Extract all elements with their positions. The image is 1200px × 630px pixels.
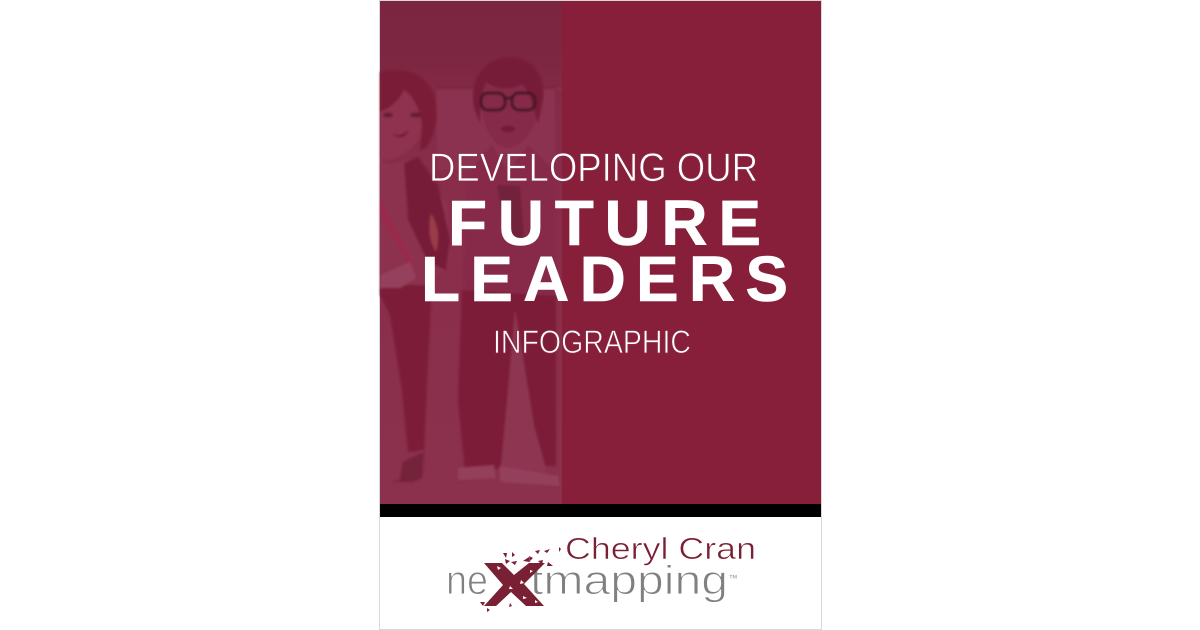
heading: developing our: DEVELOPING OUR xyxy=(429,146,758,190)
faded photo panel xyxy=(380,1,562,504)
subheading: infographic: INFOGRAPHIC xyxy=(493,324,691,360)
maroon background xyxy=(380,1,821,504)
black band xyxy=(380,504,821,517)
man figure xyxy=(458,57,560,486)
logo: Cheryl Cran nextmapping xyxy=(446,531,756,612)
logo text: trademark: ™ xyxy=(728,573,738,583)
logo icon: shattered X xyxy=(480,547,561,612)
woman figure xyxy=(380,70,450,482)
logo text: ne: ne xyxy=(446,557,488,603)
cover panel xyxy=(380,0,822,630)
heading: future: FUTURE xyxy=(448,187,761,259)
heading: leaders: LEADERS xyxy=(421,243,788,315)
illustration: two cartoon leaders xyxy=(380,57,562,486)
logo text: Cheryl Cran: Cheryl Cran xyxy=(565,531,756,566)
logo text: tmapping: tmapping xyxy=(530,557,728,603)
backdrop panel behind figures xyxy=(437,88,562,170)
